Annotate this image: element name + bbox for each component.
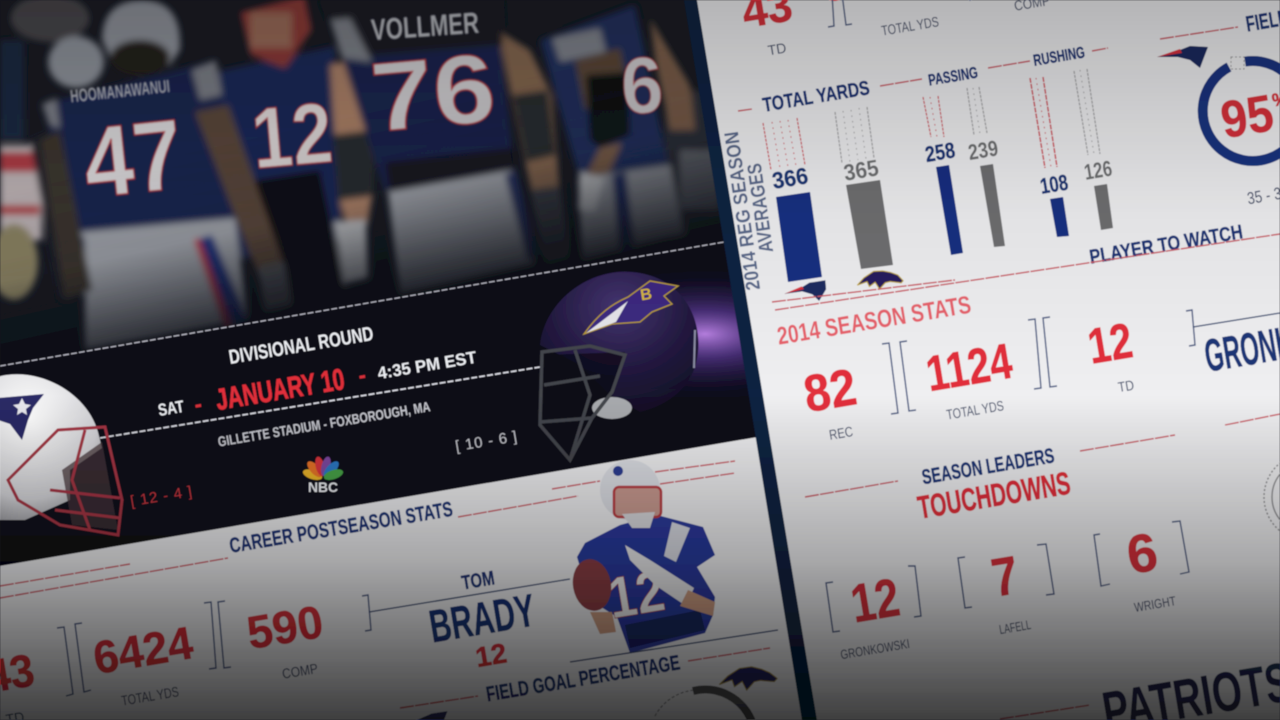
Patriots record: [ 12 - 4 ]	[129, 483, 193, 510]
panel: career stats continued	[738, 0, 1051, 58]
donut chart: Patriots field goal 95%	[1203, 57, 1280, 161]
icon: Ravens helmet	[540, 272, 698, 460]
leader: Wright: WRIGHT	[1133, 593, 1177, 615]
icon: Ravens helmet: B	[639, 286, 653, 304]
section heading: FIELD GOAL PERCENTAGE	[485, 651, 682, 706]
player name: Tom Brady: 12	[473, 637, 509, 673]
game date and time	[157, 348, 479, 420]
stat: total yards: TOTAL YDS	[120, 683, 180, 709]
player name: Tom Brady: TOM	[460, 567, 496, 595]
leader: LaFell	[958, 544, 1054, 637]
venue: GILLETTE STADIUM - FOXBOROUGH, MA	[217, 398, 431, 450]
decorative ring: right edge	[1264, 453, 1280, 541]
jersey lettering	[69, 11, 662, 197]
dash right: -	[357, 365, 367, 387]
passing Patriots bar	[923, 96, 963, 255]
stat: touchdowns: TD	[1117, 377, 1135, 395]
jersey lettering: 12	[248, 85, 336, 187]
total yards Patriots bar: 366	[770, 162, 810, 194]
jersey lettering: 47	[79, 98, 188, 220]
panel: right column background	[697, 0, 1280, 720]
stat: total yards: TOTAL YDS	[880, 13, 940, 39]
rushing Ravens bar	[1074, 69, 1114, 230]
panel: dark matchup band	[0, 240, 770, 566]
leader: Wright	[1094, 521, 1189, 615]
day: SAT	[157, 397, 186, 420]
heading: total yards: TOTAL YARDS	[761, 77, 871, 117]
section heading: CAREER POSTSEASON STATS	[228, 498, 454, 558]
dashed divider: top of band	[0, 242, 724, 366]
axis label: AVERAGES	[744, 162, 778, 254]
stat: touchdowns	[1084, 312, 1136, 395]
axis label	[721, 130, 778, 292]
stat: touchdowns: 12	[1084, 312, 1136, 375]
heading: 2014 season stats: 2014 SEASON STATS	[775, 291, 973, 351]
date: JANUARY 10	[213, 363, 347, 417]
stat: touchdowns	[738, 0, 796, 58]
stat: total yards: 6424	[89, 616, 197, 684]
panel: field goal percentage (left column)	[400, 648, 778, 720]
vertical strip divider	[684, 0, 817, 720]
icon: NBC peacock	[302, 456, 344, 495]
hero photo: Patriots players	[0, 0, 740, 370]
jersey lettering: 76	[366, 32, 500, 152]
NBC wordmark: NBC	[308, 479, 338, 495]
total yards Ravens bar	[835, 107, 893, 269]
rushing Patriots bar	[1030, 77, 1070, 237]
kickoff time: 4:35 PM EST	[376, 348, 479, 383]
stat: completions: 590	[243, 595, 327, 659]
icon: Ravens logo	[857, 270, 903, 290]
player name: Tom Brady: BRADY	[425, 584, 539, 652]
photo: Tom Brady cutout	[569, 460, 715, 653]
leader: Wright: 6	[1122, 522, 1162, 586]
panel: season leaders touchdowns	[805, 435, 1189, 662]
heading: player to watch: PLAYER TO WATCH	[1088, 221, 1244, 269]
passing Ravens bar: 239	[966, 135, 1000, 165]
icon: Patriots logo	[1157, 46, 1208, 68]
player name: Tom Brady	[425, 567, 539, 673]
passing Ravens bar	[966, 87, 1005, 247]
heading: divisional round: DIVISIONAL ROUND	[227, 323, 375, 369]
leader: LaFell: 7	[987, 545, 1023, 609]
jersey lettering: VOLLMER	[370, 7, 480, 47]
rushing Ravens bar: 126	[1082, 156, 1114, 185]
axis label: 2014 REG SEASON	[721, 130, 765, 292]
icon: Ravens logo	[719, 665, 778, 691]
leader: Gronkowski: GRONKOWSKI	[839, 636, 911, 662]
stat: completions: COMP	[281, 660, 319, 682]
stat: total yards	[922, 333, 1016, 423]
total yards Patriots bar	[763, 118, 822, 282]
icon: Patriots helmet	[0, 374, 122, 535]
stat: receptions: 82	[800, 358, 861, 424]
jersey lettering: HOOMANAWANUI	[69, 76, 171, 106]
stat: total yards: 1124	[922, 333, 1016, 402]
passing Patriots bar: 258	[923, 137, 957, 167]
jersey lettering: 6	[619, 40, 665, 131]
heading: passing: PASSING	[927, 65, 979, 90]
icon: Patriots logo	[408, 711, 449, 720]
heading: touchdowns: TOUCHDOWNS	[915, 465, 1073, 526]
donut chart: Ravens field goal	[655, 689, 752, 720]
stat: receptions: REC	[828, 423, 854, 443]
panel: career postseason stats	[0, 460, 778, 720]
panel: field goal percentage (right column)	[1157, 0, 1280, 208]
heading: rushing: RUSHING	[1032, 44, 1086, 70]
dashed divider: date and venue	[100, 367, 540, 438]
Ravens record: [ 10 - 6 ]	[454, 428, 518, 455]
icon: Patriots logo	[783, 280, 827, 304]
stat: total yards: TOTAL YDS	[945, 397, 1005, 423]
rushing Patriots bar: 108	[1038, 170, 1070, 199]
stat: total yards	[816, 0, 940, 39]
leader: Gronkowski: 12	[847, 567, 904, 634]
dash left: -	[193, 394, 203, 416]
leader: Gronkowski	[826, 566, 921, 662]
chart: 2014 regular season averages	[721, 44, 1114, 304]
heading: season leaders: SEASON LEADERS	[920, 444, 1056, 489]
photo: Tom Brady cutout: 12	[603, 558, 669, 631]
total yards Ravens bar: 365	[842, 154, 881, 186]
leader: LaFell: LAFELL	[998, 617, 1032, 637]
stat: touchdowns: TD	[766, 39, 788, 58]
panel: player to watch	[772, 221, 1280, 443]
